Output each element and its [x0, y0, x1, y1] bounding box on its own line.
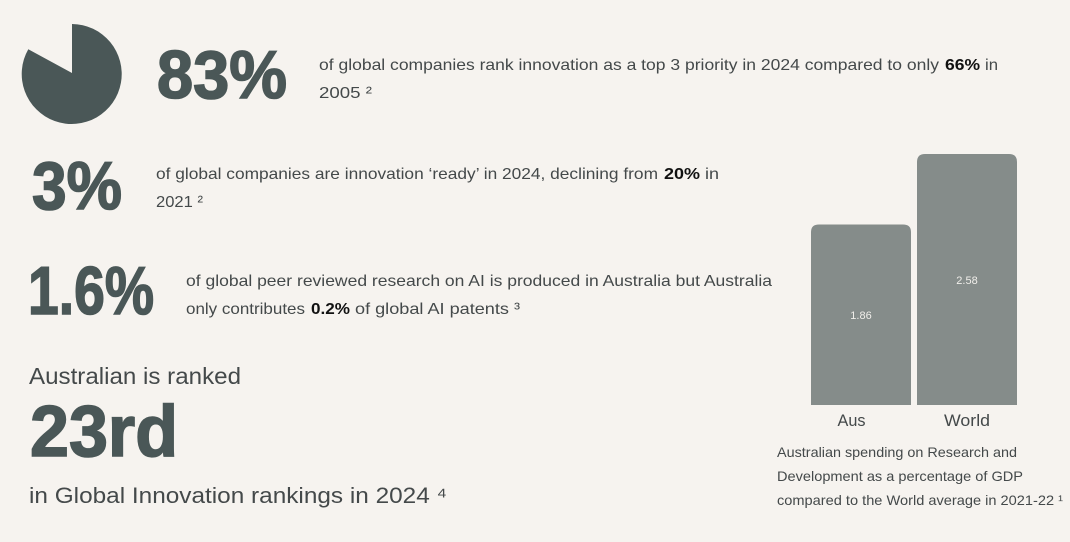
text block: 1.6% description: of global peer reviewed research on AI is produced in Australia but Australia	[186, 273, 772, 290]
text block: 3% description: 2021 ²	[156, 194, 204, 211]
caption: chart description: compared to the World average in 2021-22 ¹	[777, 492, 1063, 508]
text block: 83% description: 2005 ²	[319, 85, 373, 102]
icon: pie chart 83%	[22, 24, 122, 124]
bar chart: R&D spending	[811, 154, 1017, 430]
bar: Aus: 1.86	[850, 310, 872, 322]
text block: 83% description	[319, 57, 998, 102]
text block: 83% description: in	[985, 57, 998, 74]
bar: Aus	[811, 224, 911, 405]
stat: 83%: 83%	[157, 37, 287, 113]
text block: 83% description: of global companies rank innovation as a top 3 priority in 2024 compared to only	[319, 57, 939, 74]
bar: World: 2.58	[956, 275, 978, 287]
caption: chart description: Australian spending on Research and	[777, 444, 1017, 460]
bar: World	[917, 154, 1017, 405]
text block: 3% description: of global companies are innovation ‘ready’ in 2024, declining from	[156, 166, 658, 183]
text block: 3% description: in	[705, 166, 719, 183]
text block: 1.6% description: of global AI patents ³	[355, 301, 521, 318]
axis label: World: World	[944, 411, 990, 430]
text block: 1.6% description: 0.2%	[311, 301, 350, 318]
caption: chart description	[777, 444, 1063, 508]
text block: 3% description	[156, 166, 719, 211]
caption: chart description: Development as a percentage of GDP	[777, 468, 1023, 484]
text block: Global Innovation rankings: in Global Innovation rankings in 2024 ⁴	[29, 483, 447, 508]
stat: 23rd: 23rd	[30, 392, 178, 472]
axis label: Aus: Aus	[838, 411, 866, 430]
stat: 1.6%: 1.6%	[28, 253, 154, 329]
text block: 3% description: 20%	[664, 166, 700, 183]
text block: 83% description: 66%	[945, 57, 980, 74]
stat: 3%: 3%	[32, 148, 122, 224]
heading: Australian is ranked: Australian is ranked	[29, 363, 241, 389]
text block: 1.6% description	[186, 273, 772, 318]
text block: 1.6% description: only contributes	[186, 301, 305, 318]
